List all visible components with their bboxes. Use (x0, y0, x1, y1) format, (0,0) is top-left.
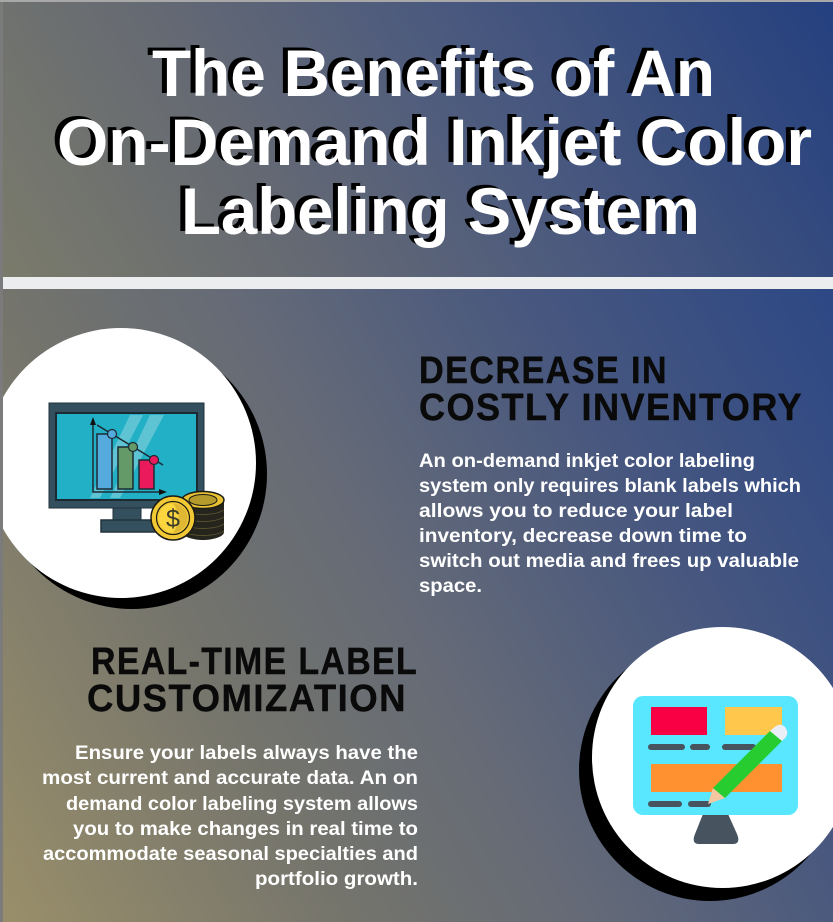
circle badge: customization (579, 627, 833, 901)
text block: inventory (419, 451, 801, 597)
heading: real-time label customization (87, 641, 418, 720)
text block: customization: you to make changes in real time to (73, 819, 418, 840)
text block: customization: portfolio growth. (255, 869, 418, 890)
icon: coin stack: $ (166, 505, 180, 533)
divider bar (3, 277, 833, 289)
text block: customization: Ensure your labels always have the (75, 743, 418, 764)
title: Labeling System (176, 171, 695, 245)
content panel (3, 289, 833, 922)
icon: screen with pencil (633, 696, 798, 844)
heading: decrease in costly inventory (419, 350, 803, 429)
title: On-Demand Inkjet Color (52, 102, 807, 176)
title: The Benefits of An (152, 36, 715, 110)
text block: inventory: system only requires blank labels which (419, 476, 801, 497)
heading: decrease in costly inventory: COSTLY INVENTORY (419, 387, 803, 429)
title: On-Demand Inkjet Color (57, 105, 812, 179)
title: The Benefits of An (147, 33, 710, 107)
heading: decrease in costly inventory: DECREASE IN (419, 350, 668, 392)
text block: inventory: space. (419, 576, 482, 597)
text block: customization (42, 743, 418, 890)
text block: inventory: allows you to reduce your label (419, 501, 733, 522)
icon: coin stack (151, 492, 224, 540)
heading: real-time label customization: CUSTOMIZATION (87, 678, 407, 720)
text block: inventory: switch out media and frees up valuable (419, 551, 799, 572)
circle badge: inventory (0, 328, 267, 609)
heading: real-time label customization: REAL-TIME LABEL (91, 641, 418, 683)
title (52, 33, 812, 248)
title: Labeling System (181, 174, 700, 248)
icon: monitor with falling bar chart and coins (49, 403, 224, 540)
text block: inventory: inventory, decrease down time to (419, 526, 747, 547)
text block: inventory: An on-demand inkjet color labeling (419, 451, 755, 472)
text block: customization: accommodate seasonal specialties and (43, 844, 418, 865)
header panel (3, 2, 833, 277)
text block: customization: demand color labeling system allows (66, 794, 418, 815)
text block: customization: most current and accurate data. An on (42, 768, 418, 789)
